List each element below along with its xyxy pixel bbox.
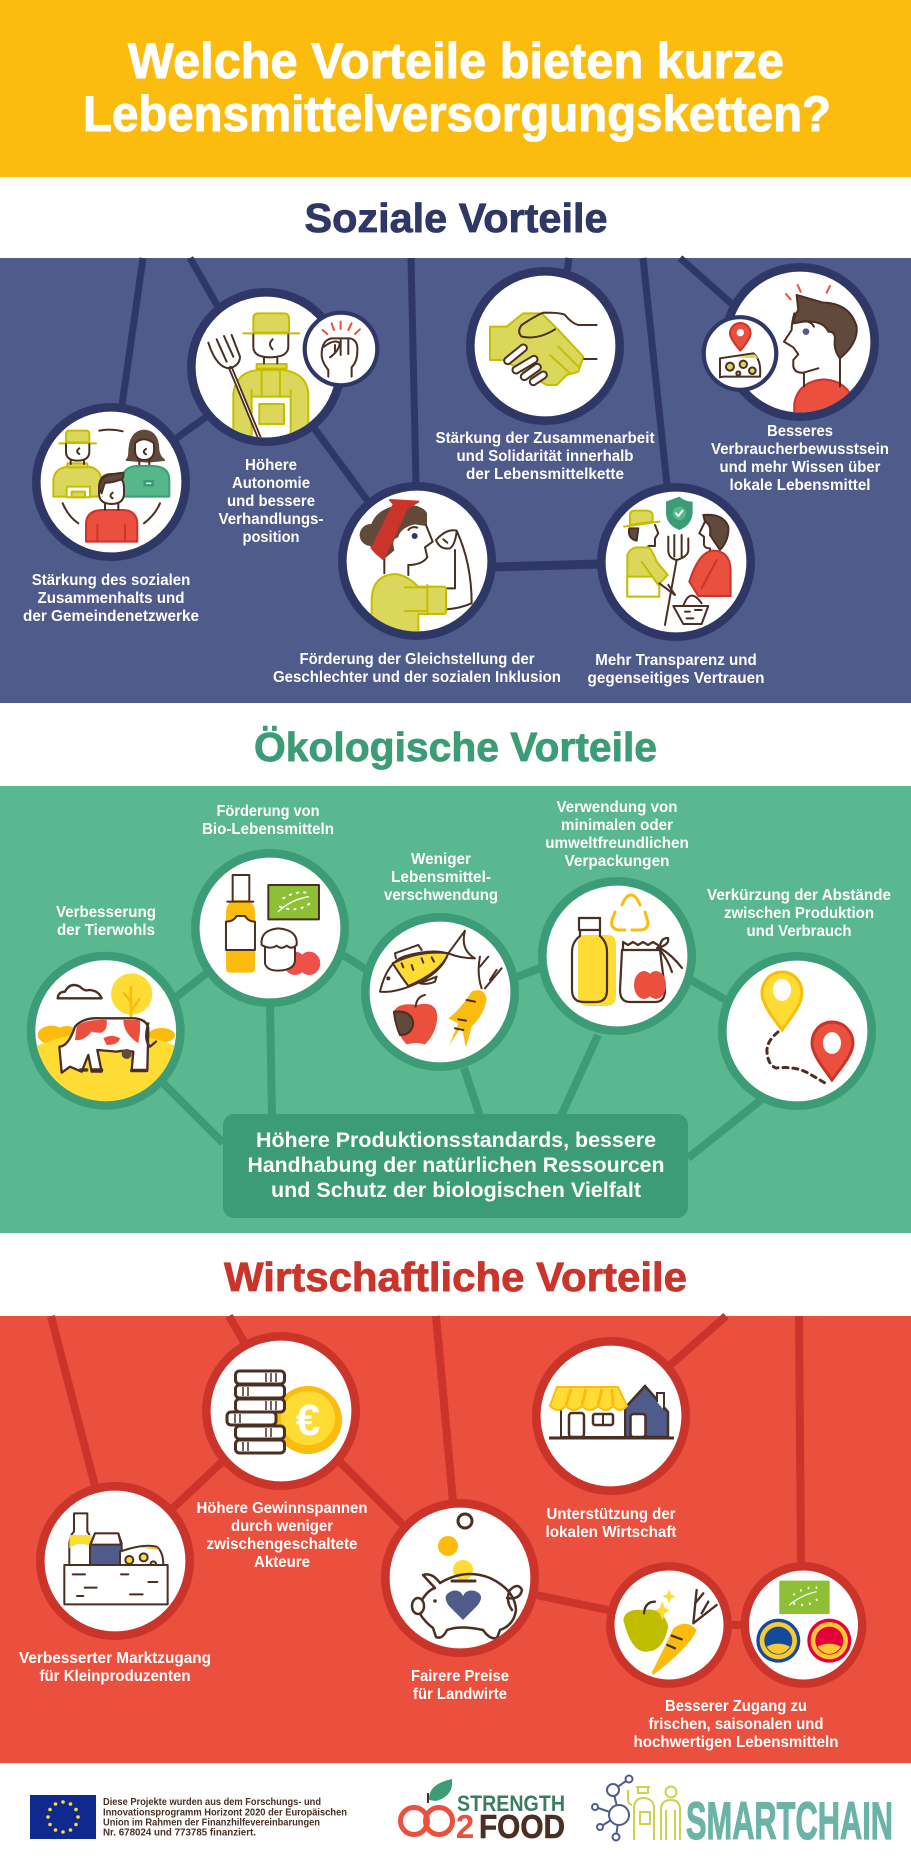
label: fair prices: Fairere Preise	[411, 1668, 509, 1685]
icon: pepper and carrot	[623, 1589, 717, 1675]
title banner	[0, 0, 911, 177]
icon: cheese and location pin	[704, 317, 776, 390]
label: packaging: Verwendung von	[556, 799, 678, 816]
label: better access: hochwertigen Lebensmitteln	[634, 1734, 838, 1751]
label: profit margins: durch weniger	[231, 1518, 333, 1535]
icon: three people	[53, 430, 169, 542]
label: transparency: gegenseitiges Vertrauen	[588, 670, 764, 687]
circle: food waste	[365, 917, 515, 1067]
circle: organic food	[195, 853, 345, 1003]
icon: bottle, recycling and jar	[572, 895, 682, 1006]
icon: fish, apple and carrot	[380, 931, 502, 1047]
label: local economy: lokalen Wirtschaft	[546, 1524, 676, 1541]
label: autonomy: Höhere	[245, 457, 297, 474]
label: autonomy: und bessere	[227, 493, 315, 510]
label: profit margins	[196, 1500, 368, 1571]
title banner: Welche Vorteile bieten kurze	[128, 33, 784, 89]
icon: route between two pins	[762, 972, 853, 1083]
label: community: Stärkung des sozialen	[32, 572, 190, 589]
icon: cow in a field	[37, 973, 175, 1102]
label: food waste	[384, 851, 498, 904]
label: shorter distances: und Verbrauch	[746, 923, 852, 940]
label: community: Zusammenhalts und	[38, 590, 184, 607]
text: funding note: Union im Rahmen der Finanzhilfevereinbarungen	[103, 1817, 320, 1829]
circle: transparency	[601, 487, 751, 637]
label: cooperation	[436, 430, 654, 483]
label: gender equality: Geschlechter und der sozialen Inklusion	[273, 669, 561, 686]
icon: piggy bank	[412, 1514, 522, 1638]
label: organic food: Förderung von	[216, 803, 320, 820]
label: packaging: Verpackungen	[564, 853, 670, 870]
box: overall result: und Schutz der biologischen Vielfalt	[271, 1179, 641, 1202]
label: profit margins: Akteure	[254, 1554, 310, 1571]
circle: market access	[40, 1486, 190, 1636]
icon: bottle, jar and organic label	[226, 875, 320, 975]
circle: fair prices	[385, 1503, 535, 1653]
heading: Ökologische Vorteile: Ökologische Vorteile	[254, 724, 657, 770]
label: organic food: Bio-Lebensmitteln	[202, 821, 334, 838]
heading: Wirtschaftliche Vorteile: Wirtschaftliche Vorteile	[224, 1254, 687, 1300]
label: cooperation: und Solidarität innerhalb	[456, 448, 634, 465]
label: market access	[19, 1650, 211, 1685]
label: food waste: verschwendung	[384, 887, 498, 904]
icon: EU quality seals	[756, 1581, 851, 1663]
label: animal welfare: Verbesserung	[56, 904, 156, 921]
label: gender equality	[273, 651, 561, 686]
circle: shorter distances	[722, 956, 872, 1106]
label: consumer awareness	[711, 423, 889, 494]
icon: raised fist	[305, 313, 377, 385]
label: local economy: Unterstützung der	[546, 1506, 676, 1523]
label: animal welfare: der Tierwohls	[57, 922, 155, 939]
heading: Soziale Vorteile: Soziale Vorteile	[304, 195, 608, 241]
circle: cooperation	[470, 271, 620, 421]
circle: consumer awareness	[725, 267, 875, 417]
circle: animal welfare	[31, 956, 180, 1113]
label: community	[23, 572, 199, 625]
icon: consumer face	[784, 285, 857, 417]
label: market access: Verbesserter Marktzugang	[19, 1650, 211, 1667]
circle: gender equality	[342, 486, 492, 637]
label: better access: Besserer Zugang zu	[665, 1698, 807, 1715]
label: shorter distances: zwischen Produktion	[724, 905, 874, 922]
label: food waste: Weniger	[411, 851, 471, 868]
label: transparency	[588, 652, 764, 687]
text: funding note: Nr. 678024 und 773785 finanziert.	[103, 1827, 256, 1839]
panel: social benefits	[0, 258, 911, 703]
label: shorter distances	[707, 887, 891, 940]
icon: farmer with pitchfork	[208, 313, 308, 447]
label: better access: frischen, saisonalen und	[648, 1716, 824, 1733]
label: cooperation: Stärkung der Zusammenarbeit	[436, 430, 654, 447]
icon: EU flag	[30, 1795, 96, 1839]
label: market access: für Kleinproduzenten	[40, 1668, 190, 1685]
logo: Strength2Food: STRENGTH	[457, 1791, 565, 1816]
label: autonomy: Autonomie	[232, 475, 310, 492]
circle: fresh produce	[610, 1566, 728, 1684]
label: community: der Gemeindenetzwerke	[23, 608, 199, 625]
label: cooperation: der Lebensmittelkette	[466, 466, 624, 483]
icon: coin stack and euro	[227, 1371, 342, 1454]
circle: local economy	[536, 1341, 686, 1491]
logo: Strength2Food: FOOD	[479, 1808, 565, 1845]
icon: handshake	[490, 313, 597, 385]
label: consumer awareness: lokale Lebensmittel	[730, 477, 870, 494]
box: overall result: Höhere Produktionsstandards, bessere	[256, 1129, 656, 1152]
label: consumer awareness: und mehr Wissen über	[720, 459, 880, 476]
icon: coin stack and euro: €	[296, 1396, 320, 1445]
circle: quality labels	[745, 1566, 862, 1684]
label: autonomy: Verhandlungs-	[218, 511, 324, 528]
label: organic food	[202, 803, 334, 838]
label: gender equality: Förderung der Gleichstellung der	[300, 651, 534, 668]
footer	[30, 1776, 893, 1851]
circle: profit margins	[206, 1336, 356, 1486]
panel: economic benefits	[0, 1316, 911, 1763]
label: profit margins: Höhere Gewinnspannen	[196, 1500, 368, 1517]
label: food waste: Lebensmittel-	[391, 869, 491, 886]
title banner: Lebensmittelversorgungsketten?	[83, 86, 831, 142]
label: packaging: minimalen oder	[561, 817, 673, 834]
label: fair prices: für Landwirte	[413, 1686, 507, 1703]
icon: crate of products	[64, 1513, 168, 1604]
label: autonomy	[218, 457, 324, 546]
label: autonomy: position	[242, 529, 300, 546]
label: local economy	[546, 1506, 676, 1541]
icon: farmer and customer with shield	[624, 497, 731, 625]
circle: community networks	[36, 407, 186, 557]
circle: packaging	[542, 881, 692, 1031]
label: shorter distances: Verkürzung der Abstände	[707, 887, 891, 904]
logo: Strength2Food: 2	[456, 1808, 474, 1845]
label: transparency: Mehr Transparenz und	[595, 652, 757, 669]
circle: autonomy	[191, 292, 341, 447]
text: funding note: Diese Projekte wurden aus dem Forschungs- und	[103, 1796, 321, 1808]
box: overall result	[223, 1114, 688, 1218]
icon: woman flexing arm	[360, 500, 472, 637]
box: overall result: Handhabung der natürlichen Ressourcen	[248, 1154, 664, 1177]
label: consumer awareness: Verbraucherbewusstsein	[711, 441, 889, 458]
panel: ecological benefits	[0, 786, 911, 1233]
label: packaging: umweltfreundlichen	[545, 835, 689, 852]
logo: SmartChain	[592, 1776, 893, 1851]
text: funding note	[103, 1796, 347, 1839]
logo: Strength2Food	[400, 1779, 565, 1845]
text: funding note: Innovationsprogramm Horizont 2020 der Europäischen	[103, 1806, 347, 1818]
icon: shop and house	[549, 1386, 674, 1438]
label: profit margins: zwischengeschaltete	[206, 1536, 358, 1553]
label: better access	[634, 1698, 838, 1751]
label: fair prices	[411, 1668, 509, 1703]
label: packaging	[545, 799, 689, 870]
label: animal welfare	[56, 904, 156, 939]
label: consumer awareness: Besseres	[767, 423, 833, 440]
